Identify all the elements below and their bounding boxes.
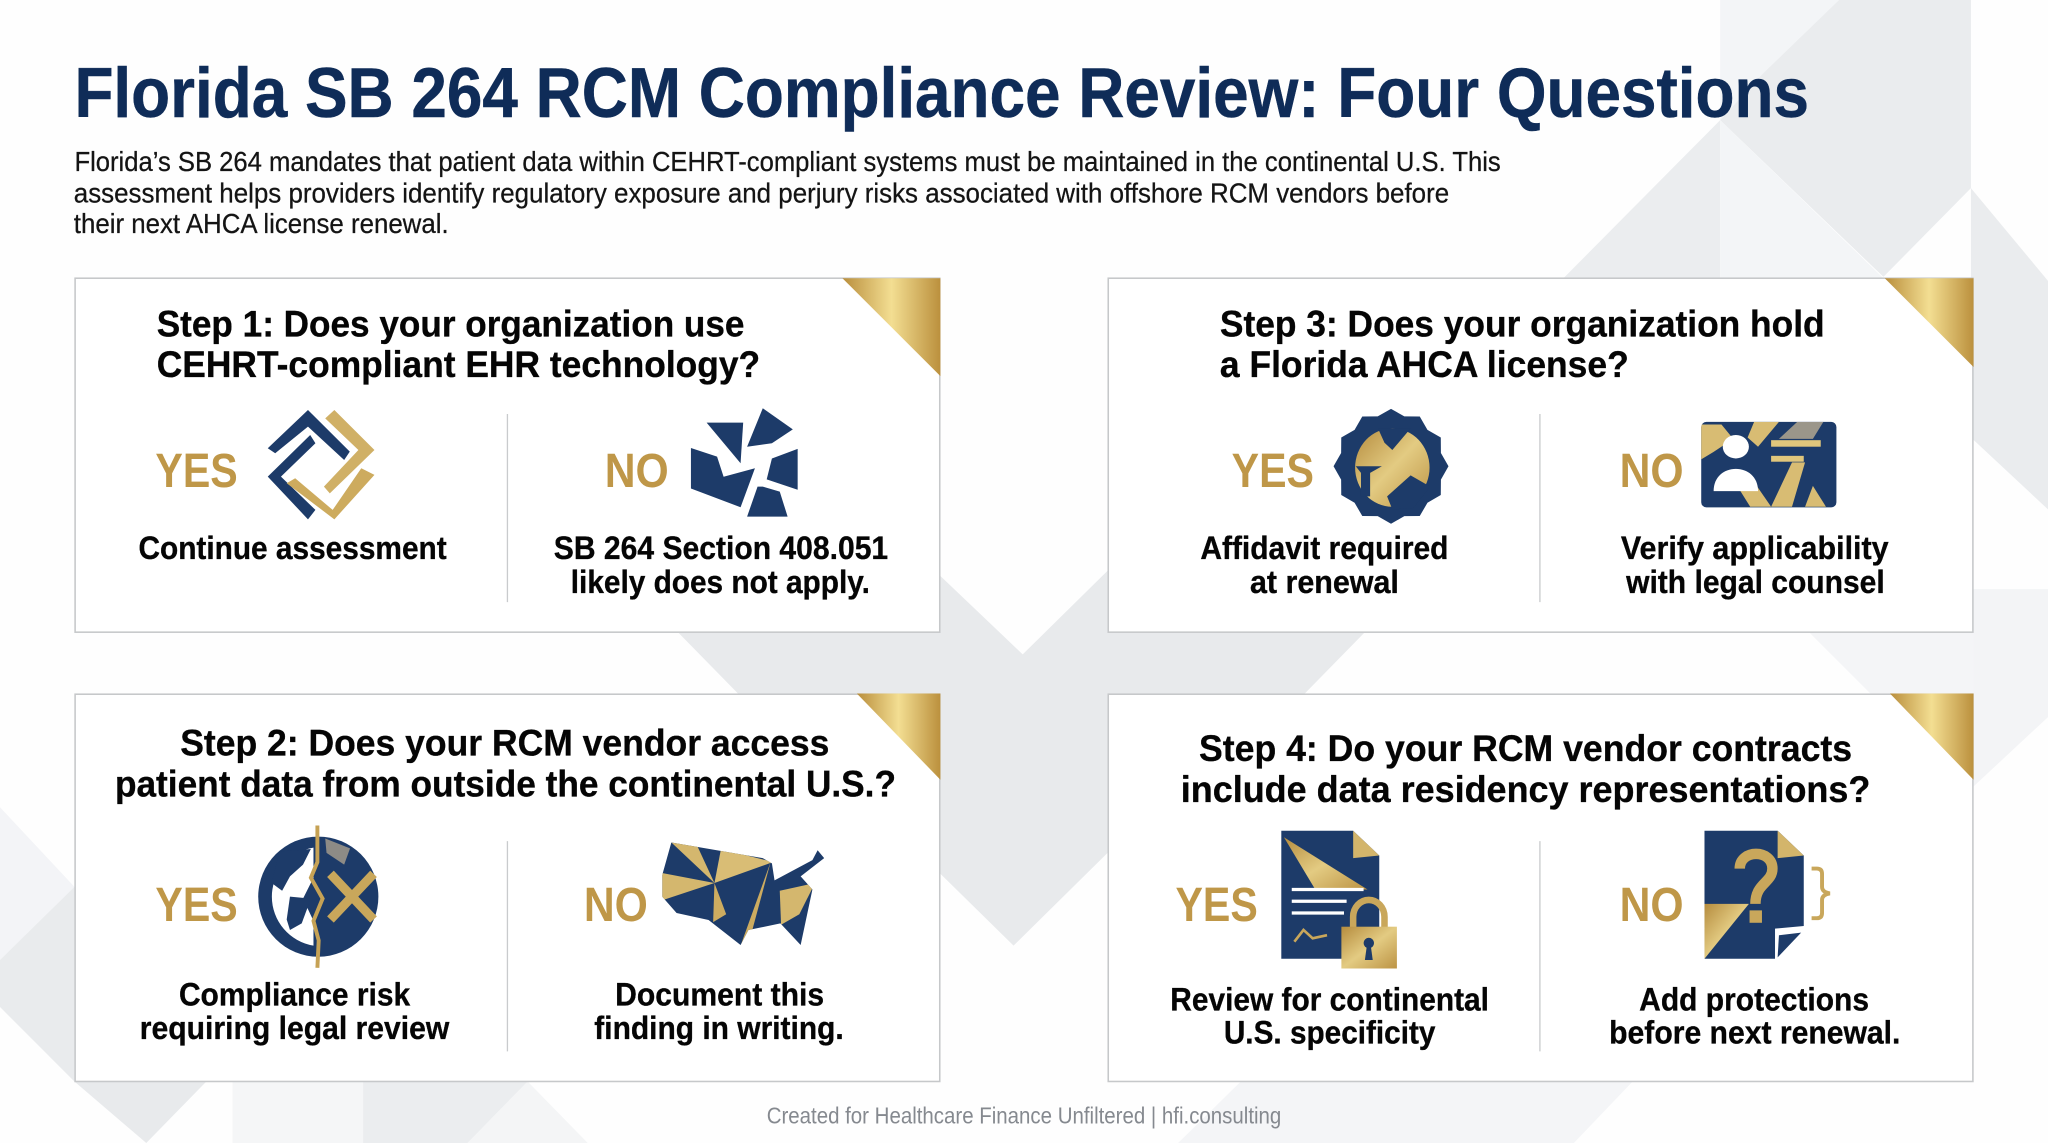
answer: step 1 no: likely does not apply.: [571, 563, 870, 600]
answer: step 1 yes: Continue assessment: [138, 529, 447, 566]
answer: step 2 yes: [140, 976, 450, 1046]
icon: contract with padlock: [1281, 831, 1397, 968]
answer: step 2 yes: requiring legal review: [140, 1009, 450, 1046]
label: step 3 no: NO: [1620, 444, 1684, 498]
heading: step 2: [115, 722, 896, 805]
panel: step 4: [1108, 694, 1974, 1081]
label: step 4 no: NO: [1620, 878, 1684, 932]
heading: step 4: include data residency representations?: [1181, 768, 1870, 810]
answer: step 4 no: Add protections: [1639, 980, 1869, 1017]
panel: step 2: [75, 694, 940, 1081]
answer: step 2 yes: Compliance risk: [179, 976, 411, 1013]
answer: step 3 yes: Affidavit required: [1200, 529, 1448, 566]
intro paragraph: [74, 146, 1501, 239]
heading: step 2: patient data from outside the continental U.S.?: [115, 763, 896, 805]
answer: step 3 yes: [1200, 529, 1448, 600]
answer: step 4 yes: U.S. specificity: [1224, 1014, 1435, 1051]
gold corner: step 4: [1890, 694, 1974, 780]
icon: faceted US map: [662, 842, 824, 945]
footer credit: Created for Healthcare Finance Unfiltered | hfi.consulting: [767, 1102, 1281, 1128]
title: Florida SB 264 RCM Compliance Review: Four Questions: [74, 53, 1809, 132]
heading: step 3: a Florida AHCA license?: [1220, 343, 1629, 385]
intro paragraph: assessment helps providers identify regulatory exposure and perjury risks associated with offshore RCM vendors before: [74, 177, 1449, 208]
icon: interlocking diamond: [268, 410, 374, 519]
icon: ID card with person: [1701, 422, 1836, 507]
answer: step 3 no: [1621, 529, 1889, 600]
gold corner: step 3: [1885, 278, 1974, 367]
heading: step 4: [1181, 727, 1870, 810]
icon: document with question mark: [1704, 831, 1830, 959]
panel: step 1: [75, 278, 940, 632]
answer: step 2 no: Document this: [615, 976, 824, 1013]
gold corner: step 2: [857, 694, 940, 780]
answer: step 4 no: before next renewal.: [1609, 1014, 1900, 1051]
answer: step 1 no: [554, 529, 888, 600]
intro paragraph: Florida’s SB 264 mandates that patient data within CEHRT-compliant systems must be maintained in the continental U.S. This: [74, 146, 1501, 177]
heading: step 3: [1220, 302, 1825, 385]
answer: step 3 no: with legal counsel: [1625, 563, 1885, 600]
icon: split globe with X: [258, 825, 378, 968]
label: step 2 yes: YES: [155, 878, 238, 932]
answer: step 4 yes: Review for continental: [1170, 980, 1489, 1017]
panel: step 3: [1108, 278, 1974, 632]
heading: step 4: Step 4: Do your RCM vendor contracts: [1199, 727, 1852, 769]
gold corner: step 1: [842, 278, 940, 376]
answer: step 4 yes: [1170, 980, 1489, 1051]
label: step 2 no: NO: [584, 878, 648, 932]
icon: license seal: [1334, 409, 1448, 524]
label: step 4 yes: YES: [1176, 878, 1258, 932]
heading: step 3: Step 3: Does your organization hold: [1220, 302, 1825, 344]
answer: step 3 no: Verify applicability: [1621, 529, 1889, 566]
answer: step 3 yes: at renewal: [1250, 563, 1399, 600]
answer: step 2 no: finding in writing.: [594, 1009, 844, 1046]
heading: step 1: CEHRT-compliant EHR technology?: [157, 343, 760, 385]
icon: broken shards: [691, 408, 798, 517]
label: step 1 no: NO: [605, 444, 669, 498]
answer: step 2 no: [594, 976, 844, 1046]
answer: step 1 no: SB 264 Section 408.051: [554, 529, 888, 566]
intro paragraph: their next AHCA license renewal.: [74, 208, 449, 239]
label: step 3 yes: YES: [1232, 444, 1314, 498]
answer: step 4 no: [1609, 980, 1900, 1051]
heading: step 1: [157, 302, 760, 385]
heading: step 2: Step 2: Does your RCM vendor access: [180, 722, 829, 764]
label: step 1 yes: YES: [155, 444, 238, 498]
heading: step 1: Step 1: Does your organization use: [157, 302, 744, 344]
